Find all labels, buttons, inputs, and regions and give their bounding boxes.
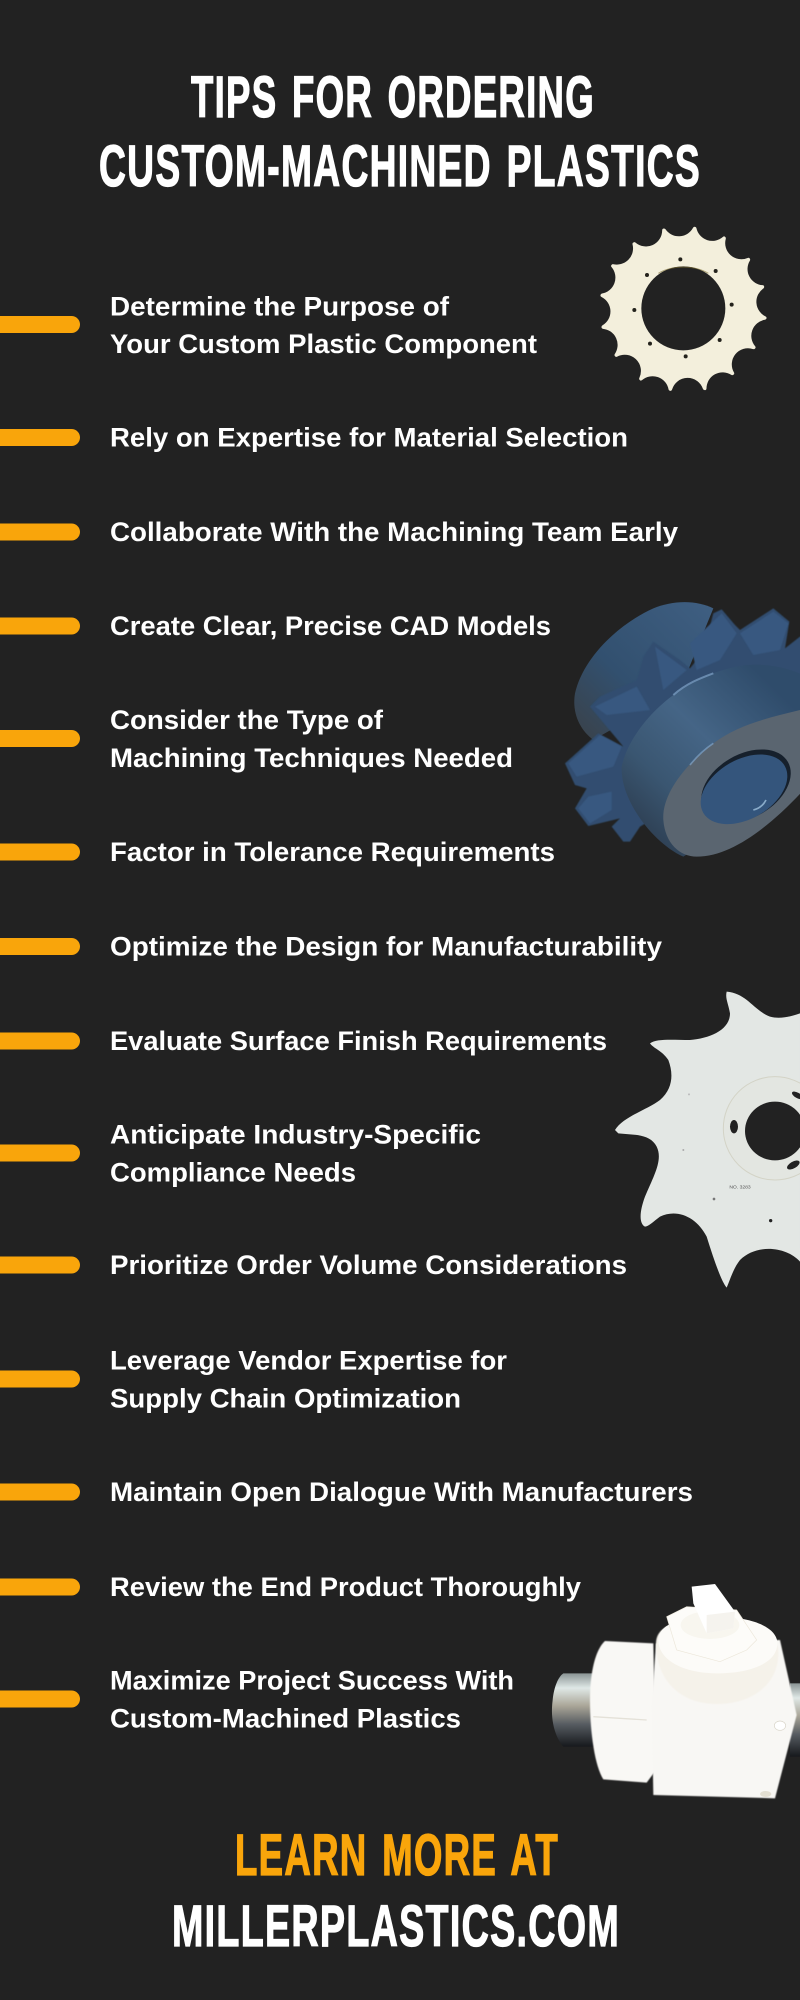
tip 11 (0, 1346, 508, 1414)
footer call to action (172, 1823, 620, 1959)
footer call to action: LEARN MORE AT (235, 1823, 559, 1888)
tip 1 (0, 292, 537, 359)
tip 10: Prioritize Order Volume Considerations (110, 1250, 627, 1280)
tip 5: Consider the Type of (110, 705, 384, 735)
title (99, 65, 701, 199)
tip 14: Custom-Machined Plastics (110, 1704, 461, 1734)
tip 5 (0, 705, 513, 773)
tip 1: Determine the Purpose of (110, 292, 450, 322)
tip 5: Machining Techniques Needed (110, 743, 513, 773)
tip 9: Compliance Needs (110, 1158, 356, 1188)
tip 2: Rely on Expertise for Material Selection (110, 422, 628, 452)
tip 7: Optimize the Design for Manufacturability (110, 932, 662, 962)
tip 11: Leverage Vendor Expertise for (110, 1346, 508, 1376)
tip 13: Review the End Product Thoroughly (110, 1572, 581, 1602)
tip 11: Supply Chain Optimization (110, 1384, 461, 1414)
icon: blue plastic sprocket (565, 602, 800, 857)
icon: cream plastic sprocket (602, 229, 765, 389)
icon: white gear with teeth (615, 992, 800, 1288)
icon: white plastic valve (552, 1584, 800, 1798)
tip 6: Factor in Tolerance Requirements (110, 837, 555, 867)
tip 8: Evaluate Surface Finish Requirements (110, 1026, 607, 1056)
tip 9 (0, 1120, 481, 1188)
tip 14 (0, 1666, 514, 1734)
tips list (0, 292, 693, 1734)
tip 14: Maximize Project Success With (110, 1666, 514, 1696)
tip 3: Collaborate With the Machining Team Early (110, 517, 678, 547)
tip 4: Create Clear, Precise CAD Models (110, 611, 551, 641)
tip 1: Your Custom Plastic Component (110, 329, 537, 359)
tip 9: Anticipate Industry-Specific (110, 1120, 481, 1150)
icon: white gear with teeth: NO. 3283 (729, 1185, 751, 1191)
tip 12: Maintain Open Dialogue With Manufacturers (110, 1477, 693, 1507)
